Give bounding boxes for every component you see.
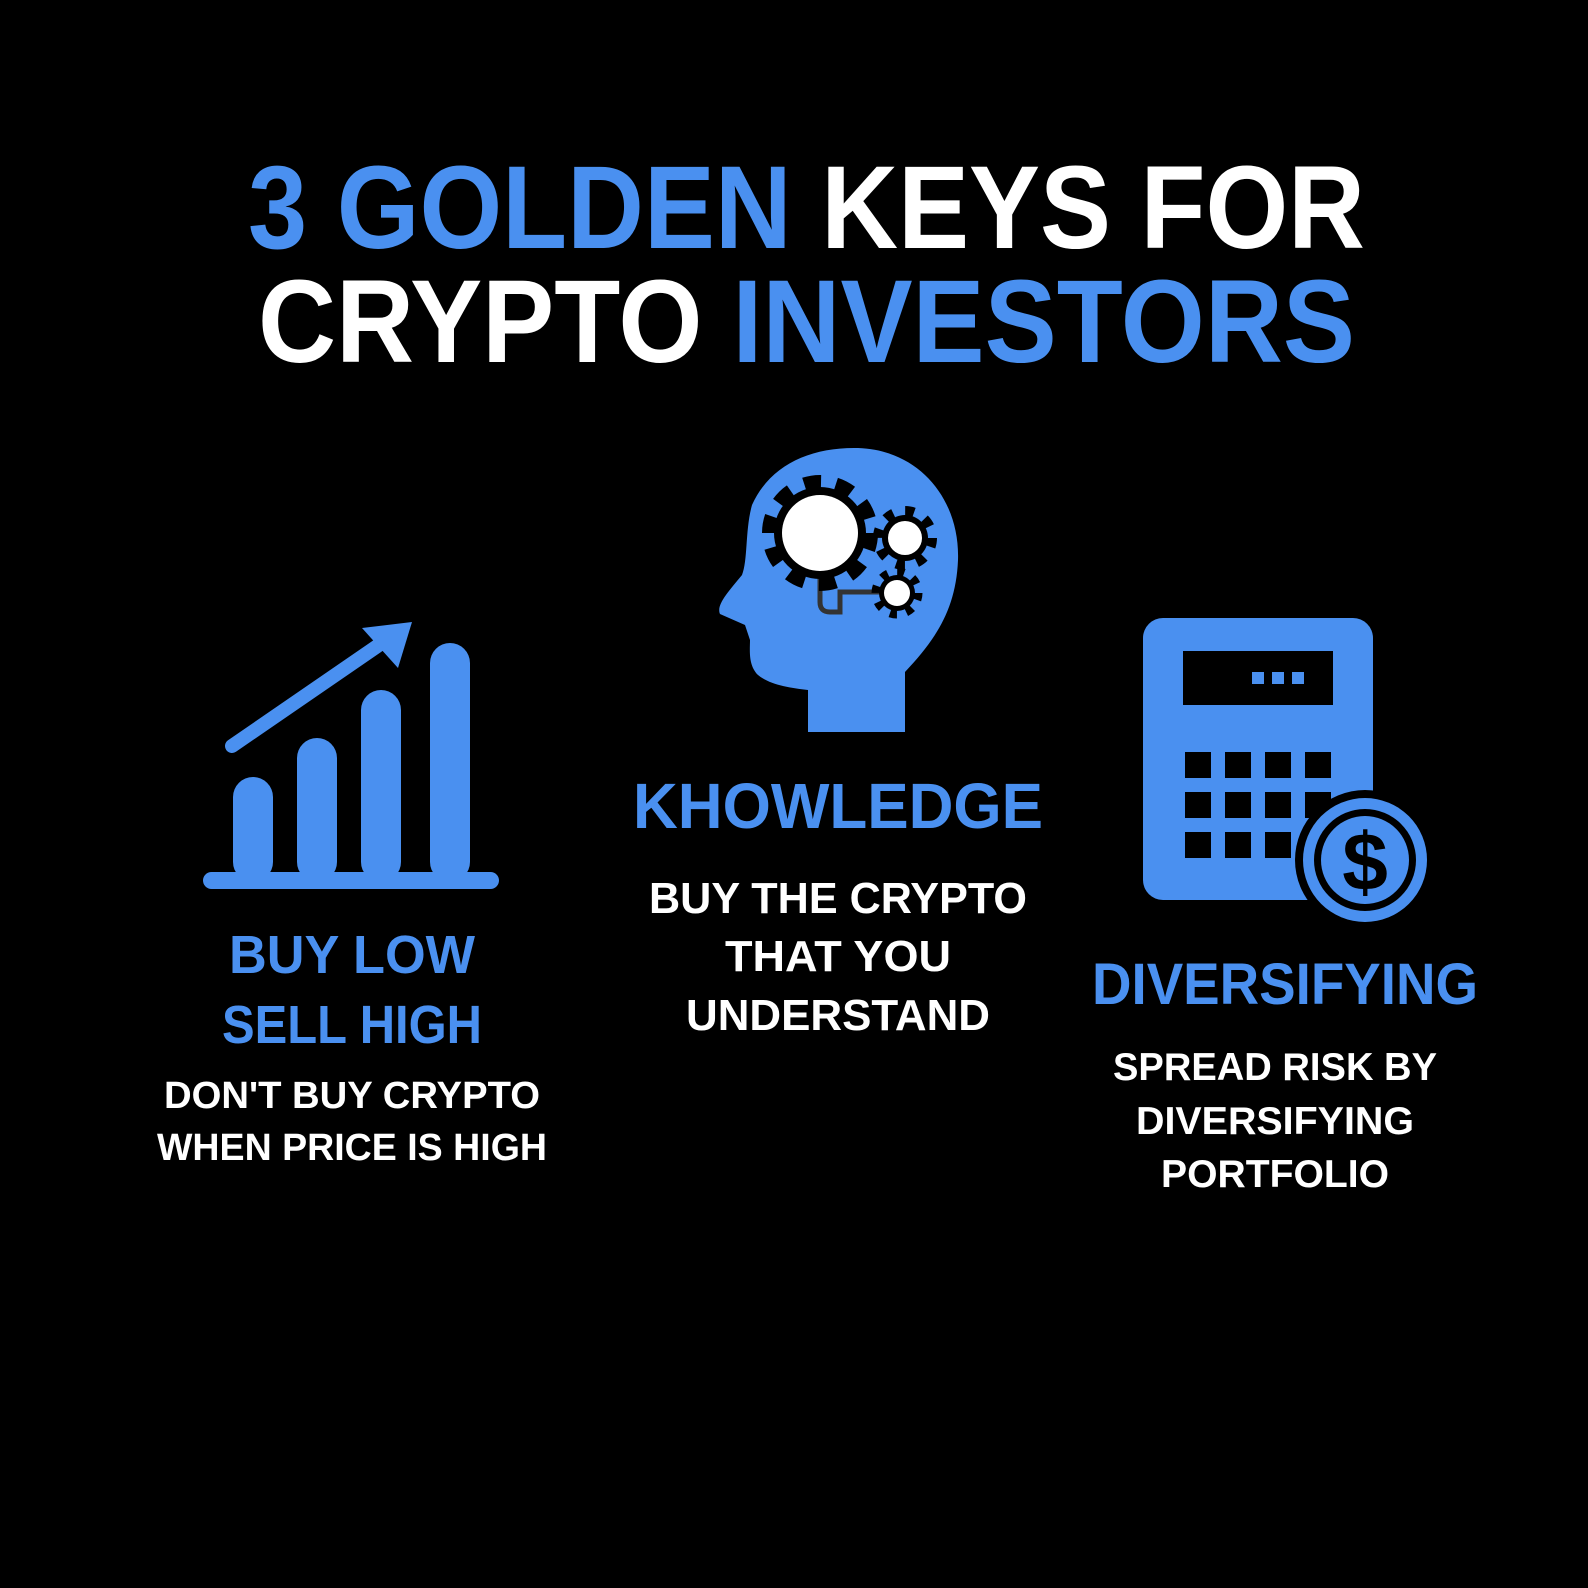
- text: knowledge description: THAT YOU: [725, 932, 951, 981]
- heading: buy low sell high: [222, 925, 482, 1055]
- heading: buy low sell high: BUY LOW: [229, 925, 475, 985]
- heading: buy low sell high: SELL HIGH: [222, 995, 482, 1055]
- heading: knowledge: KHOWLEDGE: [633, 770, 1043, 842]
- icon: head with gears: [719, 448, 958, 732]
- title: 3 GOLDEN KEYS FOR: [248, 142, 1365, 274]
- title: [248, 142, 1365, 388]
- text: buy low description: DON'T BUY CRYPTO: [164, 1075, 540, 1117]
- text: knowledge description: BUY THE CRYPTO: [649, 874, 1027, 923]
- icon: calculator with dollar: $: [1342, 817, 1388, 908]
- icon: growth chart: [203, 622, 499, 889]
- text: knowledge description: [649, 874, 1027, 1040]
- text: diversifying description: [1113, 1046, 1437, 1196]
- text: buy low description: WHEN PRICE IS HIGH: [157, 1127, 547, 1169]
- text: knowledge description: UNDERSTAND: [686, 991, 990, 1040]
- heading: diversifying: DIVERSIFYING: [1092, 952, 1478, 1017]
- icon: calculator with dollar: [1143, 618, 1435, 930]
- text: buy low description: [157, 1075, 547, 1169]
- text: diversifying description: SPREAD RISK BY: [1113, 1046, 1437, 1089]
- text: diversifying description: PORTFOLIO: [1161, 1153, 1389, 1196]
- title: CRYPTO INVESTORS: [258, 256, 1355, 388]
- text: diversifying description: DIVERSIFYING: [1136, 1100, 1414, 1143]
